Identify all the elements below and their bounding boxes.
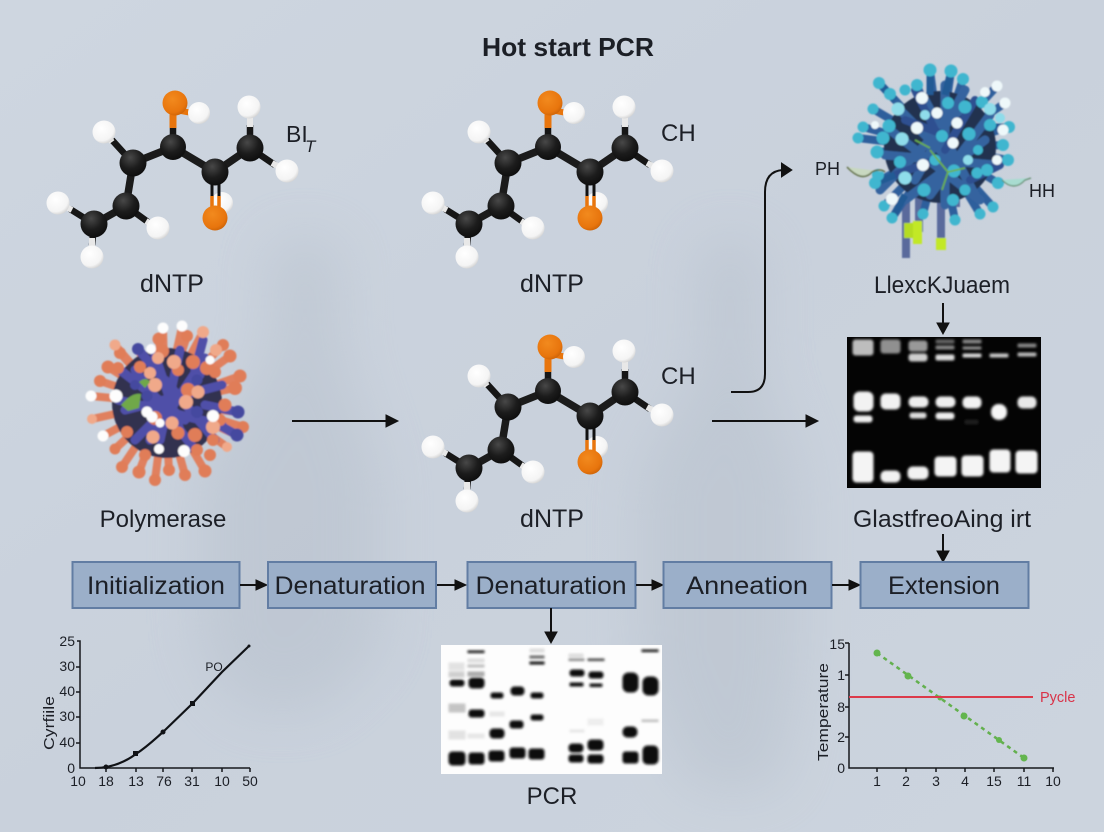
chart: amplification curve: PO [205, 660, 223, 674]
chart: amplification curve: 50 [242, 773, 258, 789]
chart: amplification curve: 30 [59, 658, 75, 674]
chart: amplification curve: 13 [128, 773, 144, 789]
step: Initialization: Initialization [87, 572, 225, 600]
chart: temperature: 4 [961, 773, 969, 789]
chart: temperature: 8 [837, 699, 845, 715]
caption: protein name: LlexcKJuaem [874, 272, 1010, 299]
step: Denaturation: Denaturation [274, 572, 426, 600]
arrow: denaturation to gel [545, 608, 557, 643]
chart: amplification curve: 30 [59, 708, 75, 724]
chart: amplification curve: 0 [67, 760, 75, 776]
step: Anneation [664, 562, 832, 608]
protein: blue and cyan [847, 64, 1031, 258]
molecule label: CH top: CH [661, 120, 696, 147]
molecule: center [422, 334, 674, 512]
arrow: step 4 to 5 [832, 580, 860, 590]
chart: amplification curve: 18 [98, 773, 114, 789]
chart: temperature: 2 [902, 773, 910, 789]
protein: polymerase [86, 320, 249, 486]
chart: temperature [815, 636, 1075, 789]
arrow: polymerase to molecule [292, 415, 398, 427]
caption: gel label: GlastfreoAing irt [853, 506, 1031, 533]
caption: dNTP center: dNTP [520, 270, 584, 298]
arrow: protein to gel [937, 303, 949, 334]
molecule: top left [46, 90, 298, 268]
protein label: PH: PH [815, 159, 840, 179]
step: Extension: Extension [888, 572, 1000, 600]
gel: light [441, 645, 662, 774]
protein legs [904, 195, 956, 258]
molecule label: BI: BI [286, 121, 308, 147]
chart: temperature: 3 [932, 773, 940, 789]
chart: amplification curve: 40 [59, 683, 75, 699]
chart: temperature: 15 [829, 636, 845, 652]
arrow: step 2 to 3 [437, 580, 466, 590]
chart: temperature: 11 [1017, 773, 1031, 789]
chart: temperature: 1 [873, 773, 881, 789]
chart: temperature: 0 [837, 760, 845, 776]
molecule label: BI [286, 121, 317, 156]
chart: temperature: 15 [986, 773, 1002, 789]
chart: amplification curve: 10 [214, 773, 230, 789]
chart: amplification curve: 76 [156, 773, 172, 789]
chart: amplification curve: 40 [59, 734, 75, 750]
step: Denaturation second: Denaturation [476, 572, 626, 600]
chart: amplification curve: 25 [59, 633, 75, 649]
arrow: step 3 to 4 [636, 580, 663, 590]
chart: amplification curve: Cyrfiile [41, 696, 58, 750]
arrow: gel label to extension [937, 534, 949, 562]
step: Initialization [72, 562, 240, 608]
chart: temperature: 2 [837, 729, 845, 745]
workflow: PCR steps [72, 562, 1028, 608]
protein label: HH: HH [1029, 181, 1055, 201]
chart: temperature: 10 [1045, 773, 1061, 789]
chart: amplification curve [41, 633, 258, 789]
molecule: top center [422, 90, 674, 268]
chart: temperature: 1 [837, 667, 845, 683]
title: Hot start PCR [482, 32, 654, 62]
step: Extension [860, 562, 1028, 608]
arrow: center molecule to gel [712, 415, 818, 427]
caption: Polymerase: Polymerase [100, 506, 226, 533]
caption: PCR: PCR [527, 783, 577, 810]
arrow: step 1 to 2 [240, 580, 267, 590]
arrow: curved up to protein [731, 164, 791, 392]
step: Denaturation second [468, 562, 636, 608]
molecule label: BI: T [305, 137, 317, 156]
caption: dNTP left: dNTP [140, 270, 204, 298]
chart: amplification curve: 31 [184, 773, 200, 789]
caption: dNTP bottom center: dNTP [520, 505, 584, 533]
step: Anneation: Anneation [686, 572, 808, 600]
gel: dark [847, 337, 1041, 488]
chart: temperature: Pycle [1040, 690, 1075, 706]
chart: temperature: Temperature [815, 663, 832, 761]
chart: amplification curve: 10 [70, 773, 86, 789]
molecule label: CH center: CH [661, 363, 696, 390]
step: Denaturation [268, 562, 436, 608]
